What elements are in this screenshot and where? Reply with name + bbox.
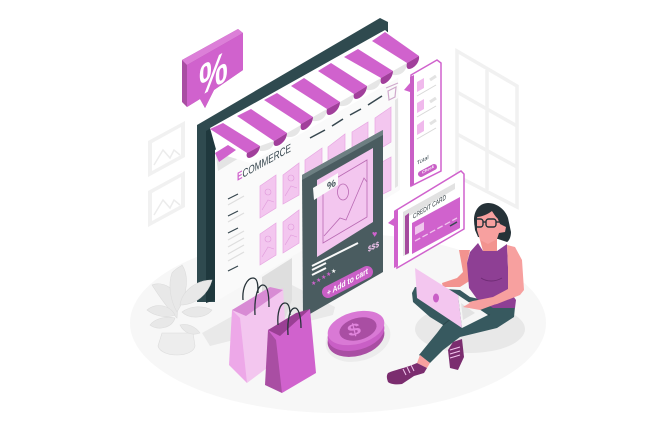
neck: [480, 238, 497, 251]
cart icon: [386, 83, 398, 100]
percent speech bubble: %: [199, 40, 228, 107]
woman sitting with laptop: [387, 203, 525, 384]
product card: [302, 130, 383, 318]
discount tag: [313, 173, 338, 200]
rating stars: ★: [321, 274, 326, 281]
percent speech bubble: [182, 29, 243, 108]
credit card panel: [388, 171, 464, 268]
back arm: [442, 250, 471, 287]
receipt panel: Check: [422, 163, 435, 175]
window on wall: [457, 51, 517, 207]
credit card panel: CREDIT CARD: [413, 193, 446, 221]
laptop: [415, 268, 488, 328]
floor ellipse: [130, 233, 546, 413]
product image: [317, 148, 373, 257]
receipt panel: Total: [417, 155, 429, 167]
awning: [210, 30, 420, 163]
leg crease: [443, 310, 490, 325]
shopping bag: dark: [265, 303, 316, 393]
price and heart: [368, 229, 379, 254]
monitor stand: [202, 258, 335, 346]
price and heart: $$$: [368, 239, 379, 254]
price and heart: ♥: [372, 229, 377, 239]
head: [475, 207, 506, 244]
right shoe: [448, 339, 464, 370]
sidebar filters: [228, 194, 244, 271]
credit card: [412, 197, 460, 254]
rating stars: [311, 268, 336, 287]
heading: ECOMMERCE: ECOMMERCE: [237, 141, 291, 184]
rating stars: ★: [331, 268, 336, 275]
front arm: [463, 245, 524, 307]
left shoe: [387, 355, 430, 384]
shopping bag: light: [229, 278, 287, 383]
dollar coin stack: $: [346, 319, 363, 341]
add to cart button: + Add to cart: [327, 266, 368, 298]
torso: [467, 243, 516, 308]
rating stars: ★: [326, 271, 331, 278]
screen: [215, 64, 400, 302]
wall pictures: [148, 121, 185, 227]
nav dashes: [310, 96, 382, 138]
receipt panel: [404, 60, 441, 186]
hair back: [474, 203, 511, 242]
add to cart button: [327, 266, 368, 298]
rating stars: ★: [316, 277, 321, 284]
discount tag: %: [327, 177, 336, 193]
plant: [147, 265, 212, 355]
monitor frame: [197, 18, 388, 303]
pants: [412, 287, 515, 363]
dollar coin stack: [320, 305, 396, 369]
title lines: [312, 243, 358, 275]
hand: [463, 300, 496, 310]
rating stars: ★: [311, 280, 316, 287]
product cards grid: [260, 107, 391, 265]
scrollbar: [395, 98, 398, 188]
